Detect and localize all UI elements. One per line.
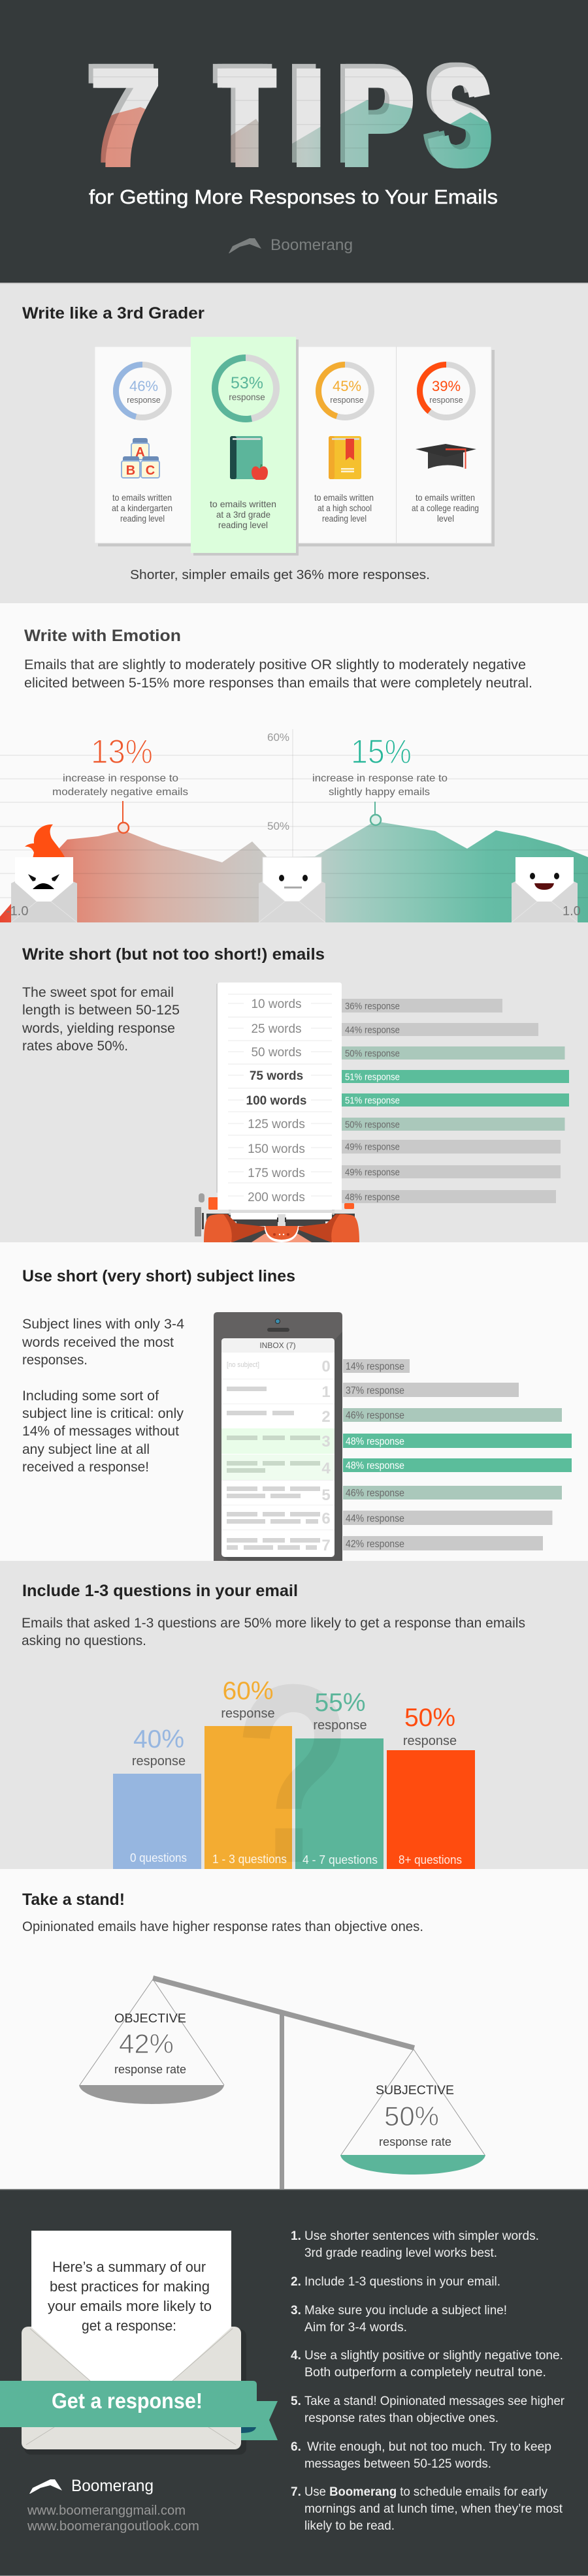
panel: write with emotion xyxy=(0,603,588,922)
word count labels: 50 words xyxy=(251,1046,302,1060)
panel: write short xyxy=(0,922,588,1242)
summary list: Aim for 3-4 words. xyxy=(304,2321,407,2334)
body text: Emails that are slightly to moderately positive OR slightly to moderately negative xyxy=(24,657,526,672)
bar labels: response xyxy=(221,1706,275,1721)
axis end labels: -1.0 xyxy=(6,904,28,919)
callout: 13% negative: 13% xyxy=(91,733,153,771)
subject line placeholder bars xyxy=(227,1387,320,1550)
bar labels: 50% xyxy=(404,1704,455,1732)
panel: write like a 3rd grader xyxy=(0,284,588,603)
word count labels: 10 words xyxy=(251,997,302,1011)
paper with word counts xyxy=(216,982,342,1213)
icon: yellow book with bookmark xyxy=(329,436,361,479)
caption: 3rd grade: at a 3rd grade xyxy=(216,509,270,520)
caption: college: to emails written xyxy=(416,492,475,503)
word count labels: 100 words xyxy=(246,1094,306,1108)
summary list: 3. xyxy=(291,2304,301,2317)
word count labels: 200 words xyxy=(248,1191,305,1204)
word count labels: 125 words xyxy=(248,1118,305,1131)
heading: Take a stand! xyxy=(22,1891,125,1909)
bar labels: 55% xyxy=(314,1689,366,1717)
summary list: Make sure you include a subject line! xyxy=(304,2304,507,2317)
bar chart: response by subject length: 48% response xyxy=(346,1460,404,1471)
phone screen xyxy=(221,1338,335,1557)
no subject placeholder: [no subject] xyxy=(227,1361,259,1369)
summary list: Take a stand! Opinionated messages see higher xyxy=(304,2395,565,2408)
word count labels: 175 words xyxy=(248,1167,305,1180)
envelope with letter xyxy=(22,2231,246,2455)
bar chart: response by word count: 44% response xyxy=(345,1025,400,1035)
body text: The sweet spot for email xyxy=(22,985,174,1000)
axis end labels xyxy=(6,904,581,919)
icon: angry envelope with flame xyxy=(11,825,77,922)
body text: words, yielding response xyxy=(22,1021,175,1036)
panel: summary footer xyxy=(0,2189,588,2576)
caption: kindergarten xyxy=(112,492,172,524)
right pan: subjective: response rate xyxy=(379,2135,451,2148)
bar chart: response by word count: 50% response xyxy=(345,1048,400,1059)
bar captions: 4 - 7 questions xyxy=(302,1853,378,1866)
caption: college: level xyxy=(437,513,454,524)
body text: any subject line at all xyxy=(22,1442,150,1457)
bar chart: response by word count: 36% response xyxy=(345,1001,400,1012)
bar chart: response by question count xyxy=(113,1631,475,1916)
axis labels xyxy=(267,731,289,832)
typewriter illustration xyxy=(195,1193,359,1242)
right pan: subjective xyxy=(340,2049,485,2175)
axis labels: 60% xyxy=(267,731,289,744)
letter text xyxy=(48,2259,212,2334)
heading: Use short (very short) subject lines xyxy=(22,1267,295,1285)
brand name: Boomerang xyxy=(270,236,353,254)
header panel xyxy=(0,0,588,284)
bar chart: response by word count: 51% response xyxy=(345,1095,400,1106)
ribbon: get a response xyxy=(0,2381,278,2440)
right pan: subjective: 50% xyxy=(384,2101,439,2131)
ring: 3rd grade 53%: response xyxy=(229,392,265,402)
subject word counts: 0 xyxy=(321,1358,331,1375)
body text xyxy=(24,657,532,691)
ribbon: get a response: Get a response! xyxy=(52,2389,203,2413)
bar chart: response by subject length: 37% response xyxy=(346,1385,404,1396)
bar chart: response by subject length: 46% response xyxy=(346,1488,404,1499)
balance scale xyxy=(79,1978,485,2190)
caption: kindergarten: reading level xyxy=(120,513,165,524)
ring: college 39% xyxy=(419,364,473,418)
icon: large question mark: ? xyxy=(234,1631,352,1916)
ring: 3rd grade 53% xyxy=(215,358,276,419)
bar chart: response by word count: 50% response xyxy=(345,1119,400,1131)
right pan: subjective: SUBJECTIVE xyxy=(376,2084,454,2097)
body text: Emails that asked 1-3 questions are 50% more likely to get a response than emails xyxy=(22,1616,525,1631)
title: 7 TIPS: 7 TIPS xyxy=(89,40,491,195)
subtitle: for Getting More Responses to Your Emails xyxy=(89,185,498,208)
bar chart: response by word count: 49% response xyxy=(345,1167,400,1178)
bar labels xyxy=(132,1677,457,1768)
footer logo: Boomerang xyxy=(71,2477,154,2495)
callout: 15% positive: 15% xyxy=(351,733,412,771)
bar chart: response by subject length: 46% response xyxy=(346,1410,404,1421)
bar labels: 60% xyxy=(222,1677,274,1705)
word count labels: 75 words xyxy=(250,1069,303,1083)
subject word counts: 7 xyxy=(321,1537,331,1554)
summary list: 6. xyxy=(291,2440,301,2454)
summary list: response rates than objective ones. xyxy=(304,2411,498,2425)
subject word counts: 3 xyxy=(321,1433,331,1451)
bar captions xyxy=(130,1851,462,1866)
icon: abc blocks xyxy=(122,438,159,478)
ring: high school 45%: 45% xyxy=(333,378,361,394)
bar chart: response by word count: 51% response xyxy=(345,1072,400,1082)
summary list: messages between 50-125 words. xyxy=(304,2457,491,2471)
bar chart: response by subject length xyxy=(343,1359,572,1550)
bar chart: response by subject length: 42% response xyxy=(346,1539,404,1550)
callout: 13% negative xyxy=(52,733,188,833)
heading: Write like a 3rd Grader xyxy=(22,304,204,322)
phone illustration: INBOX (7) xyxy=(259,1341,296,1350)
subject word counts: 6 xyxy=(321,1510,331,1528)
ring: kindergarten 46%: response xyxy=(127,396,161,405)
ring: college 39%: 39% xyxy=(432,378,461,394)
bar captions: 1 - 3 questions xyxy=(212,1853,287,1866)
summary list: Both outperform a completely neutral tone. xyxy=(304,2366,546,2380)
ring: high school 45% xyxy=(319,364,371,418)
panel: short subject lines xyxy=(0,1242,588,1561)
ring: high school 45%: response xyxy=(330,396,364,405)
bar chart: response by word count: 48% response xyxy=(345,1192,400,1202)
word count labels: 25 words xyxy=(251,1022,302,1036)
summary list: 4. xyxy=(291,2349,301,2363)
subject word counts: 2 xyxy=(321,1408,331,1426)
body text: Including some sort of xyxy=(22,1389,159,1404)
subject word counts: 1 xyxy=(321,1383,331,1401)
body text: subject line is critical: only xyxy=(22,1406,184,1421)
callout: 15% positive: increase in response rate to xyxy=(312,773,448,784)
letter text: Here’s a summary of our xyxy=(52,2259,206,2275)
icon: abc blocks: A xyxy=(135,445,145,460)
summary list: 7. xyxy=(291,2485,301,2499)
axis labels: 50% xyxy=(267,820,289,832)
summary list: 1. xyxy=(291,2229,301,2243)
caption: 3rd grade: to emails written xyxy=(210,499,276,509)
body text: 14% of messages without xyxy=(22,1424,179,1439)
word count labels xyxy=(246,997,306,1204)
left pan: objective: response rate xyxy=(114,2063,186,2076)
summary list: 3rd grade reading level works best. xyxy=(304,2246,497,2260)
body text: received a response! xyxy=(22,1460,149,1475)
takeaway text: Shorter, simpler emails get 36% more responses. xyxy=(130,568,430,582)
subject word counts xyxy=(321,1358,331,1554)
left pan: objective: 42% xyxy=(119,2028,174,2059)
summary list: Write enough, but not too much. Try to keep xyxy=(307,2440,551,2454)
bar labels: response xyxy=(403,1734,457,1748)
ring: 3rd grade 53%: 53% xyxy=(231,374,263,392)
summary list: Use shorter sentences with simpler words. xyxy=(304,2229,539,2243)
caption: college: at a college reading xyxy=(412,503,479,513)
callout: 15% positive xyxy=(312,733,448,825)
bar chart: response by word count xyxy=(342,999,569,1203)
body text: rates above 50%. xyxy=(22,1039,128,1054)
body text: length is between 50-125 xyxy=(22,1003,180,1018)
summary list: 5. xyxy=(291,2395,301,2408)
body text: Opinionated emails have higher response rates than objective ones. xyxy=(22,1919,423,1934)
website links xyxy=(27,2504,199,2534)
caption: kindergarten: at a kindergarten xyxy=(112,503,172,513)
icon: abc blocks: C xyxy=(146,463,155,478)
caption: college xyxy=(412,492,479,524)
ring: college 39%: response xyxy=(429,396,463,405)
body text xyxy=(22,985,180,1054)
icon: boomerang logo xyxy=(229,238,261,253)
bar captions: 8+ questions xyxy=(399,1853,462,1866)
left pan: objective: OBJECTIVE xyxy=(114,2012,186,2026)
bar chart: response by subject length: 14% response xyxy=(346,1361,404,1372)
bar captions: 0 questions xyxy=(130,1851,187,1864)
left pan: objective xyxy=(79,1979,224,2104)
summary list: Use a slightly positive or slightly negative tone. xyxy=(304,2349,563,2363)
caption: high school: reading level xyxy=(322,513,367,524)
website links: www.boomeranggmail.com xyxy=(27,2504,186,2518)
icon: graduation cap xyxy=(416,444,476,469)
icon: neutral envelope xyxy=(259,857,325,922)
summary list: likely to be read. xyxy=(304,2519,395,2533)
caption: 3rd grade xyxy=(210,499,276,530)
callout: 13% negative: increase in response to xyxy=(63,773,178,784)
letter text: your emails more likely to xyxy=(48,2298,212,2314)
callout: 15% positive: slightly happy emails xyxy=(329,787,430,798)
body text xyxy=(22,1317,184,1475)
icon: green book and apple xyxy=(230,436,268,480)
icon: abc blocks: B xyxy=(126,463,135,478)
caption: high school xyxy=(314,492,374,524)
letter text: best practices for making xyxy=(50,2278,210,2295)
summary list: 2. xyxy=(291,2275,301,2289)
body text: elicited between 5-15% more responses than emails that were completely neutral. xyxy=(24,676,532,691)
summary list: mornings and at lunch time, when they’re most xyxy=(304,2502,563,2516)
phone illustration xyxy=(214,1312,342,1561)
panel: include questions xyxy=(0,1561,588,1916)
bar labels: response xyxy=(313,1718,367,1733)
title: 7 TIPS xyxy=(89,63,491,168)
caption: high school: to emails written xyxy=(314,492,374,503)
website links: www.boomerangoutlook.com xyxy=(27,2519,199,2534)
callout: 13% negative: moderately negative emails xyxy=(52,787,188,798)
bar chart: response by subject length: 48% response xyxy=(346,1436,404,1447)
caption: kindergarten: to emails written xyxy=(112,492,172,503)
bar labels: 40% xyxy=(133,1725,184,1753)
summary list xyxy=(291,2229,565,2533)
subject word counts: 5 xyxy=(321,1486,331,1504)
body text: responses. xyxy=(22,1353,88,1368)
body text: asking no questions. xyxy=(22,1633,146,1648)
reading level cards xyxy=(95,337,495,556)
bar labels: response xyxy=(132,1754,186,1768)
summary list: Use Boomerang to schedule emails for early xyxy=(304,2485,547,2499)
caption: high school: at a high school xyxy=(318,503,372,513)
icon: happy envelope xyxy=(512,857,578,922)
axis end labels: 1.0 xyxy=(563,904,581,919)
word count labels: 150 words xyxy=(248,1142,305,1156)
heading: Write with Emotion xyxy=(24,627,181,645)
caption: 3rd grade: reading level xyxy=(218,520,268,530)
summary list: Include 1-3 questions in your email. xyxy=(304,2275,500,2289)
footer logo xyxy=(29,2477,154,2495)
subject word counts: 4 xyxy=(321,1460,331,1477)
body text: words received the most xyxy=(22,1335,174,1350)
heading: Write short (but not too short!) emails xyxy=(22,945,325,964)
area chart: sentiment vs response xyxy=(0,729,588,922)
bar chart: response by word count: 49% response xyxy=(345,1141,400,1153)
heading: Include 1-3 questions in your email xyxy=(22,1582,298,1600)
letter text: get a response: xyxy=(82,2317,176,2334)
ring: kindergarten 46% xyxy=(116,364,169,418)
bar chart: response by subject length: 44% response xyxy=(346,1513,404,1524)
body text xyxy=(22,1616,525,1648)
ring: kindergarten 46%: 46% xyxy=(129,378,158,394)
panel: take a stand xyxy=(0,1869,588,2190)
body text: Subject lines with only 3-4 xyxy=(22,1317,184,1332)
